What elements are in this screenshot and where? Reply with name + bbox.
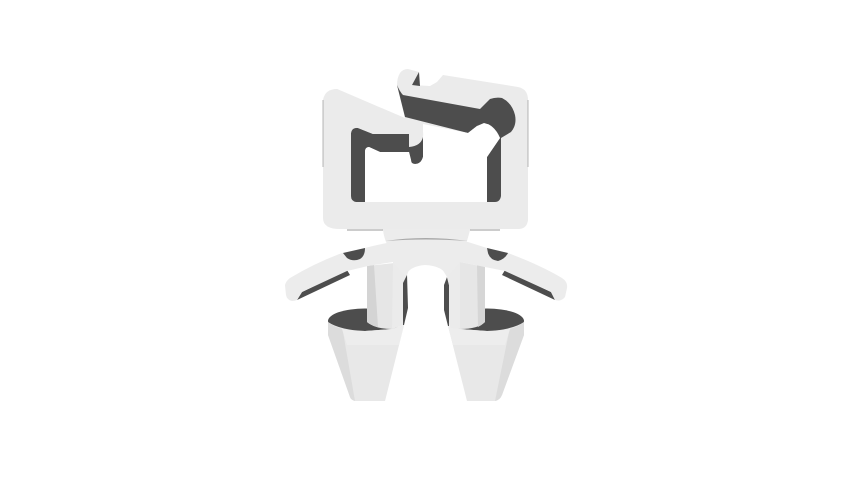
neck bbox=[381, 226, 472, 244]
edge shadows bbox=[322, 100, 324, 167]
curved spring wings bbox=[285, 238, 567, 301]
right cone bbox=[448, 322, 524, 401]
body outline bbox=[323, 69, 528, 229]
left leg slot shadow bbox=[403, 274, 408, 325]
right cylinder bbox=[460, 262, 485, 329]
hook shadow bbox=[397, 85, 516, 202]
left crescent shadow bbox=[343, 248, 365, 260]
right cone top shadow bbox=[450, 308, 524, 334]
right leg slot shadow bbox=[444, 277, 449, 326]
central opening bbox=[365, 123, 500, 202]
wing band bbox=[285, 238, 567, 301]
right crescent shadow bbox=[487, 248, 508, 261]
left cone bbox=[328, 322, 404, 401]
left lower leg with cylinder and cone bbox=[328, 262, 412, 401]
right lower leg with cylinder and cone bbox=[438, 262, 524, 401]
wing under shadows bbox=[297, 270, 350, 300]
left leg strip bbox=[392, 262, 412, 329]
left cylinder bbox=[367, 262, 403, 329]
hook notch bbox=[412, 72, 420, 86]
clip head body bbox=[323, 69, 528, 244]
inner shadow left bbox=[351, 128, 423, 202]
right leg strip bbox=[438, 262, 460, 329]
left cone top shadow bbox=[328, 308, 402, 334]
left lip bbox=[330, 89, 423, 147]
